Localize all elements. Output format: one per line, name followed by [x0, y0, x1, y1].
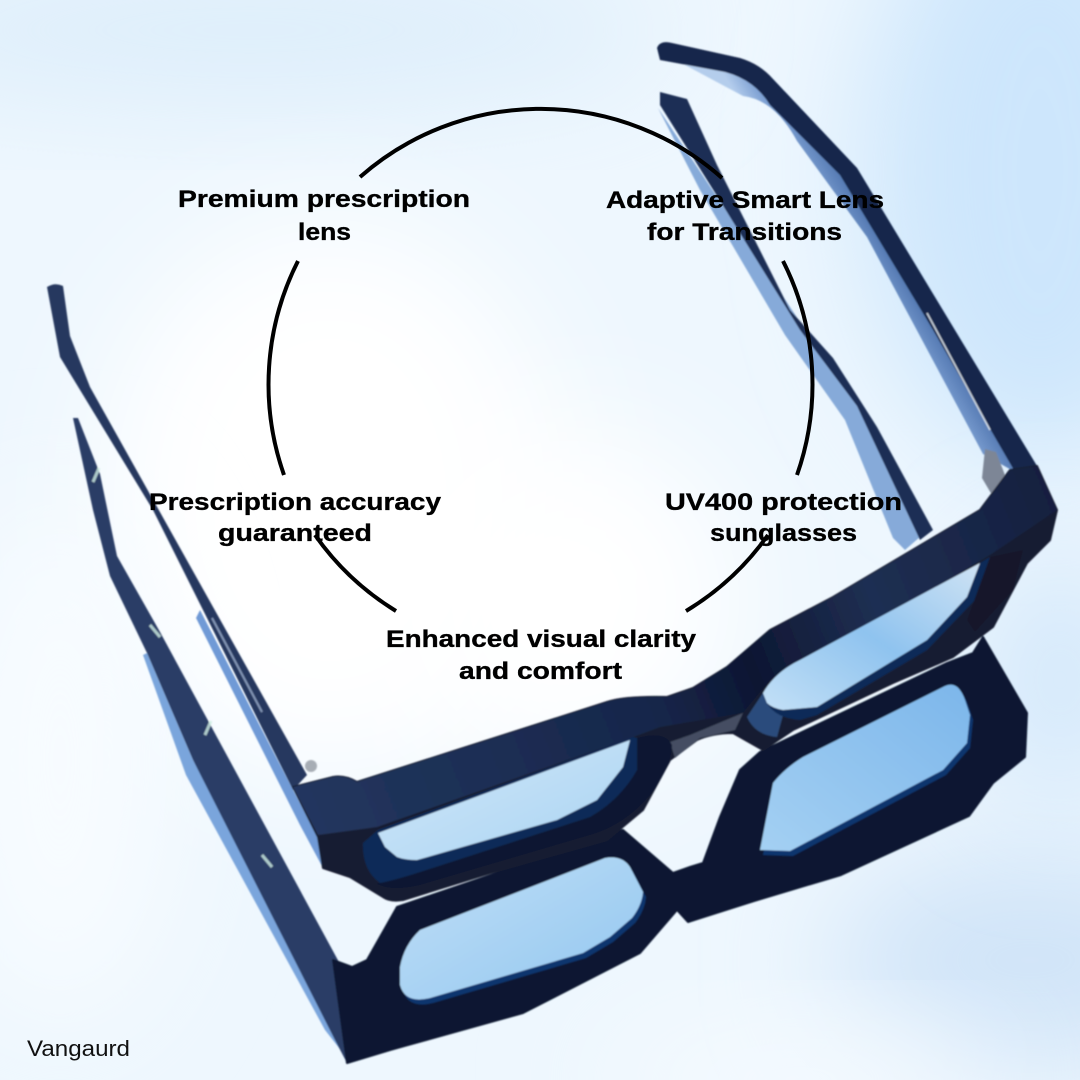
label: UV400 protection [665, 489, 902, 547]
label: adaptive smart lens: Adaptive Smart Lens [606, 187, 884, 214]
upper right lens [763, 563, 980, 710]
label: premium prescription lens: Premium prescription [178, 186, 470, 213]
label: prescription accuracy [149, 489, 442, 547]
right temple [657, 42, 1037, 495]
lower left lens rim [403, 862, 646, 1004]
right lens ribbed inner wall [967, 550, 1023, 632]
left lens rim [363, 737, 637, 883]
lower frame reflection [333, 637, 1027, 1063]
label: enhanced visual clarity: and comfort [459, 658, 622, 685]
hinge [982, 449, 1005, 495]
label: UV400 protection: sunglasses [710, 520, 857, 547]
lower right lens rim [763, 690, 973, 856]
upper frame top face [293, 466, 1057, 835]
lower left lens [400, 857, 643, 999]
left lens dark surround [375, 735, 672, 888]
label: UV400 protection: UV400 protection [665, 489, 902, 516]
label: adaptive smart lens [606, 187, 884, 246]
label: enhanced visual clarity [386, 626, 697, 685]
left temple [47, 284, 323, 868]
right lens rim [767, 557, 990, 720]
hinge [305, 760, 317, 772]
left temple reflection [73, 418, 352, 1063]
brand name: Vangaurd [27, 1036, 130, 1061]
bridge highlight [670, 713, 743, 758]
label: prescription accuracy: guaranteed [218, 520, 372, 547]
right temple reflection [658, 92, 933, 550]
label: premium prescription lens [178, 186, 470, 246]
right lens blue block [747, 693, 783, 737]
upper left lens [378, 740, 630, 860]
circle arcs [269, 109, 812, 611]
label: premium prescription lens: lens [298, 219, 351, 246]
lower right lens [760, 685, 970, 851]
upper frame [293, 466, 1057, 901]
label: enhanced visual clarity: Enhanced visual clarity [386, 626, 697, 653]
label: adaptive smart lens: for Transitions [647, 219, 842, 246]
label: prescription accuracy: Prescription accuracy [149, 489, 442, 516]
